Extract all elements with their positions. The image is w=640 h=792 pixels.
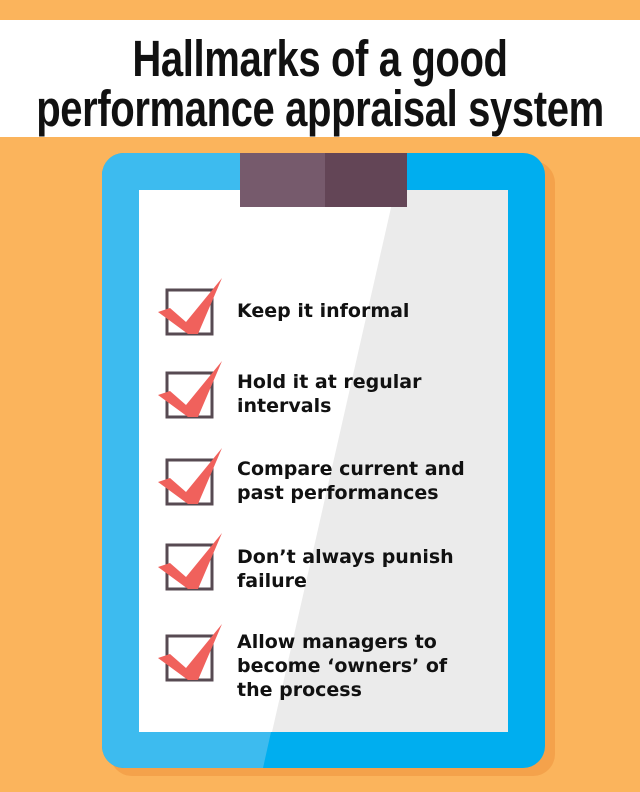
item 2: Hold it at regular xyxy=(237,371,422,393)
item 3 xyxy=(158,448,465,506)
item 2: intervals xyxy=(237,395,331,417)
item 4: failure xyxy=(237,570,307,592)
item 4: Don’t always punish xyxy=(237,546,454,568)
title xyxy=(0,20,640,137)
title: performance appraisal system xyxy=(36,80,604,137)
item 5: Allow managers to xyxy=(237,631,437,653)
item 1: Keep it informal xyxy=(237,300,409,322)
title: Hallmarks of a good xyxy=(132,30,508,87)
item 4 xyxy=(158,533,454,592)
item 5 xyxy=(158,624,448,701)
item 5: the process xyxy=(237,679,362,701)
clipboard xyxy=(102,153,555,776)
item 2 xyxy=(158,361,422,418)
item 3: Compare current and xyxy=(237,458,465,480)
item 3: past performances xyxy=(237,482,439,504)
item 5: become ‘owners’ of xyxy=(237,655,447,677)
item 1 xyxy=(158,278,409,336)
